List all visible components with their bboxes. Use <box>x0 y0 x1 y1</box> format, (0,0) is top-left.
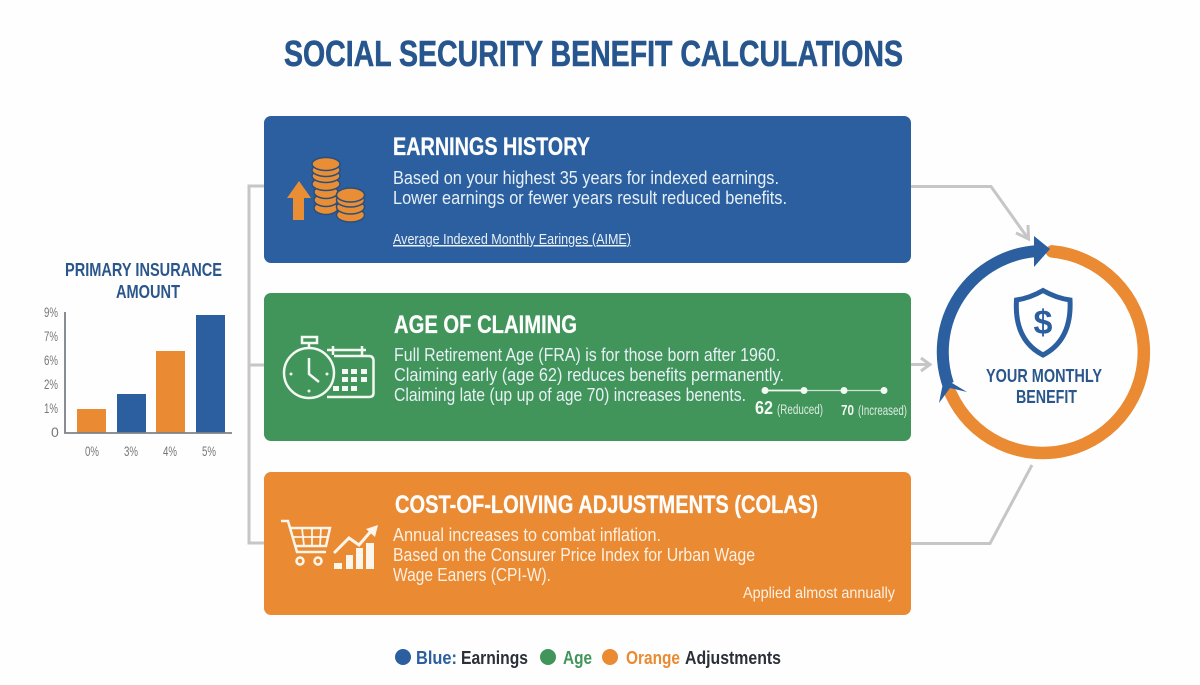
benefit ring <box>939 236 1144 453</box>
heading: EARNINGS HISTORY <box>393 133 590 161</box>
connectors: left bracket to panels <box>249 186 264 543</box>
bar chart: 9% <box>44 304 58 320</box>
icon: shield with dollar <box>1016 290 1070 355</box>
body text: Based on the Consurer Price Index for Urban Wage <box>393 544 755 565</box>
bar chart: 0 <box>51 424 59 440</box>
icon: stopwatch and calendar <box>284 337 374 398</box>
blue arrow arc <box>939 236 1050 403</box>
bar chart: 2% <box>44 376 58 392</box>
orange arc <box>951 251 1144 453</box>
bar chart: 7% <box>44 328 58 344</box>
bar chart: 5% <box>202 443 216 459</box>
legend: Age <box>563 648 592 668</box>
panel: earnings history <box>264 116 911 263</box>
panel: primary insurance amount chart <box>44 260 232 459</box>
body text: Claiming early (age 62) reduces benefits permanently. <box>394 364 784 385</box>
legend: Orange <box>626 648 680 668</box>
chart heading <box>65 260 222 302</box>
legend: Earnings <box>461 648 528 668</box>
chart heading: PRIMARY INSURANCE <box>65 260 222 280</box>
bar chart: 4% <box>163 443 177 459</box>
age timeline: (Increased) <box>858 402 907 418</box>
age timeline <box>755 387 907 419</box>
legend: Adjustments <box>685 648 781 668</box>
age timeline: 62 <box>755 398 773 418</box>
bar chart <box>44 304 232 459</box>
body text: Based on your highest 35 years for indexed earnings. <box>393 167 779 188</box>
connector: adjustments panel to benefit ring <box>911 465 1032 544</box>
bar chart: 0% <box>85 443 99 459</box>
body text <box>394 344 784 405</box>
legend <box>395 648 781 668</box>
icon: shield with dollar: $ <box>1034 304 1053 342</box>
AIME note: Average Indexed Monthly Earinges (AIME) <box>393 231 631 248</box>
heading: AGE OF CLAIMING <box>394 311 577 339</box>
age timeline: (Reduced) <box>777 401 823 417</box>
body text <box>393 167 787 208</box>
ring label: BENEFIT <box>1016 387 1077 407</box>
title: SOCIAL SECURITY BENEFIT CALCULATIONS <box>284 33 903 74</box>
panel: age of claiming <box>264 293 911 441</box>
bar chart: 6% <box>44 352 58 368</box>
note: Applied almost annually <box>743 585 895 602</box>
ring label: YOUR MONTHLY <box>986 366 1102 386</box>
body text: Lower earnings or fewer years result reduced benefits. <box>393 187 787 208</box>
heading: COST-OF-LOIVING ADJUSTMENTS (COLAS) <box>395 491 818 519</box>
connector: earnings panel to benefit ring <box>911 186 1028 239</box>
bar chart: 3% <box>124 443 138 459</box>
body text: Full Retirement Age (FRA) is for those born after 1960. <box>394 344 780 365</box>
connector: age panel to benefit ring <box>911 358 930 371</box>
body text: Claiming late (up up of age 70) increases benents. <box>394 384 746 405</box>
bar chart: 1% <box>44 400 58 416</box>
icon: shopping cart and rising chart <box>281 521 378 569</box>
ring label <box>986 366 1102 407</box>
age timeline: 70 <box>841 402 854 419</box>
panel: cost-of-living adjustments <box>264 472 911 615</box>
legend: Blue: <box>416 648 457 668</box>
body text <box>393 524 755 585</box>
chart heading: AMOUNT <box>116 282 180 302</box>
body text: Wage Eaners (CPI-W). <box>393 564 551 585</box>
icon: coin stacks and up arrow <box>287 158 364 222</box>
body text: Annual increases to combat inflation. <box>393 524 661 545</box>
